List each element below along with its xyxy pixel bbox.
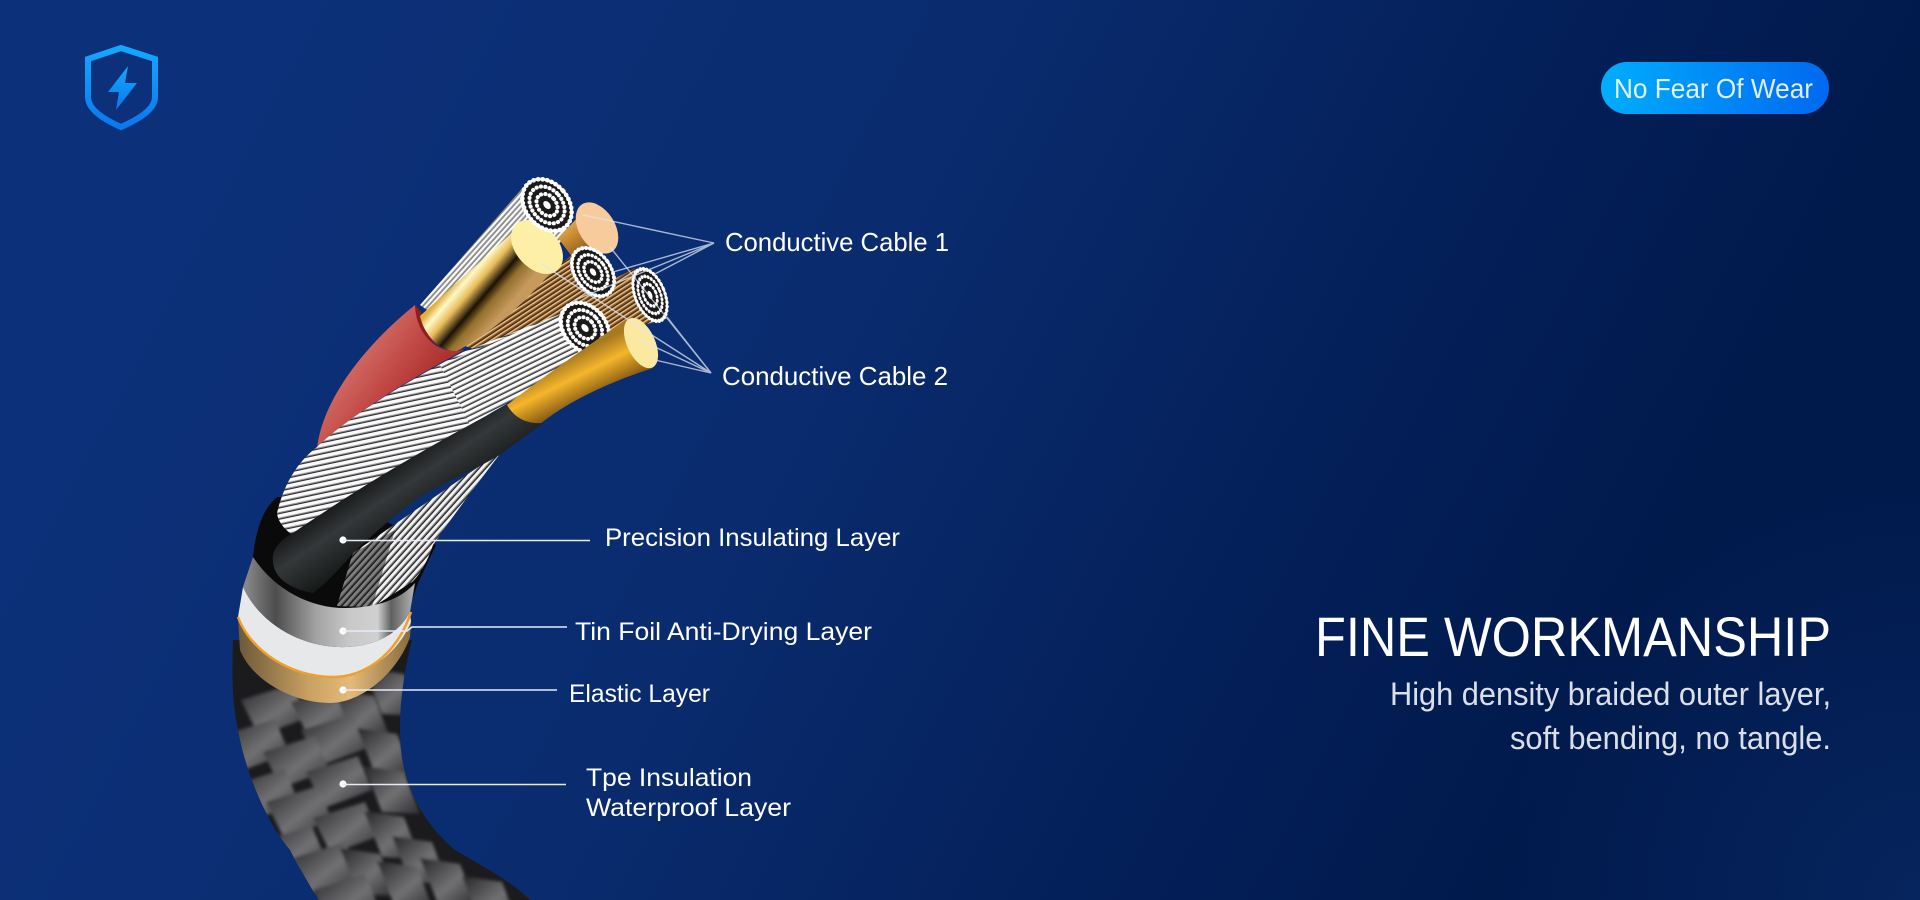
- copper strand bundle right: [490, 268, 662, 355]
- callout: Tpe Insulation Waterproof Layer: [339, 764, 791, 822]
- icon: shield with lightning bolt: [88, 48, 155, 127]
- cable cross-section illustration: [223, 168, 675, 900]
- callout: Tin Foil Anti-Drying Layer: Tin Foil Anti-Drying Layer: [575, 618, 872, 646]
- orange rim line: [238, 612, 411, 677]
- description text: High density braided outer layer,: [1390, 676, 1831, 712]
- main silver strand bundle: [277, 313, 603, 535]
- description text: [1390, 676, 1831, 756]
- callout: Elastic Layer: [339, 680, 710, 708]
- copper strand bundle middle: [462, 250, 612, 358]
- braided outer layer: [223, 640, 530, 900]
- callout: Elastic Layer: Elastic Layer: [569, 680, 710, 708]
- silver wire end right: [625, 263, 675, 327]
- elastic layer band: [238, 617, 411, 703]
- callout: Precision Insulating Layer: [339, 524, 900, 552]
- description text: soft bending, no tangle.: [1510, 720, 1831, 756]
- silver wire end low: [550, 292, 620, 364]
- white layer band: [238, 587, 411, 677]
- silver wire end top: [511, 168, 583, 242]
- small copper core: [558, 195, 627, 262]
- dark sleeve interior: [253, 497, 436, 630]
- callout: Tpe Insulation Waterproof Layer: Waterproof Layer: [586, 794, 791, 822]
- label: Conductive Cable 2: Conductive Cable 2: [722, 361, 948, 391]
- label: Conductive Cable 1: Conductive Cable 1: [725, 227, 949, 257]
- heading: FINE WORKMANSHIP: FINE WORKMANSHIP: [1315, 605, 1831, 668]
- leader lines: conductive cable 2: [540, 247, 711, 373]
- leader lines: conductive cable 1: [575, 215, 714, 300]
- black insulated conductor: [273, 405, 543, 593]
- badge: No Fear Of Wear: [1601, 62, 1829, 114]
- tin foil band: [243, 557, 415, 647]
- callout: Tin Foil Anti-Drying Layer: [339, 618, 872, 646]
- callout: Tpe Insulation Waterproof Layer: Tpe Insulation: [586, 764, 752, 792]
- red insulated sheath: [317, 305, 464, 449]
- silver wire end middle: [562, 239, 624, 305]
- lower silver strands: [337, 450, 503, 607]
- top silver strands: [420, 183, 570, 340]
- callout: Precision Insulating Layer: Precision Insulating Layer: [605, 524, 900, 552]
- lower gold conductor: [507, 313, 665, 424]
- badge: No Fear Of Wear: No Fear Of Wear: [1614, 73, 1813, 104]
- large gold conductor: [420, 210, 573, 351]
